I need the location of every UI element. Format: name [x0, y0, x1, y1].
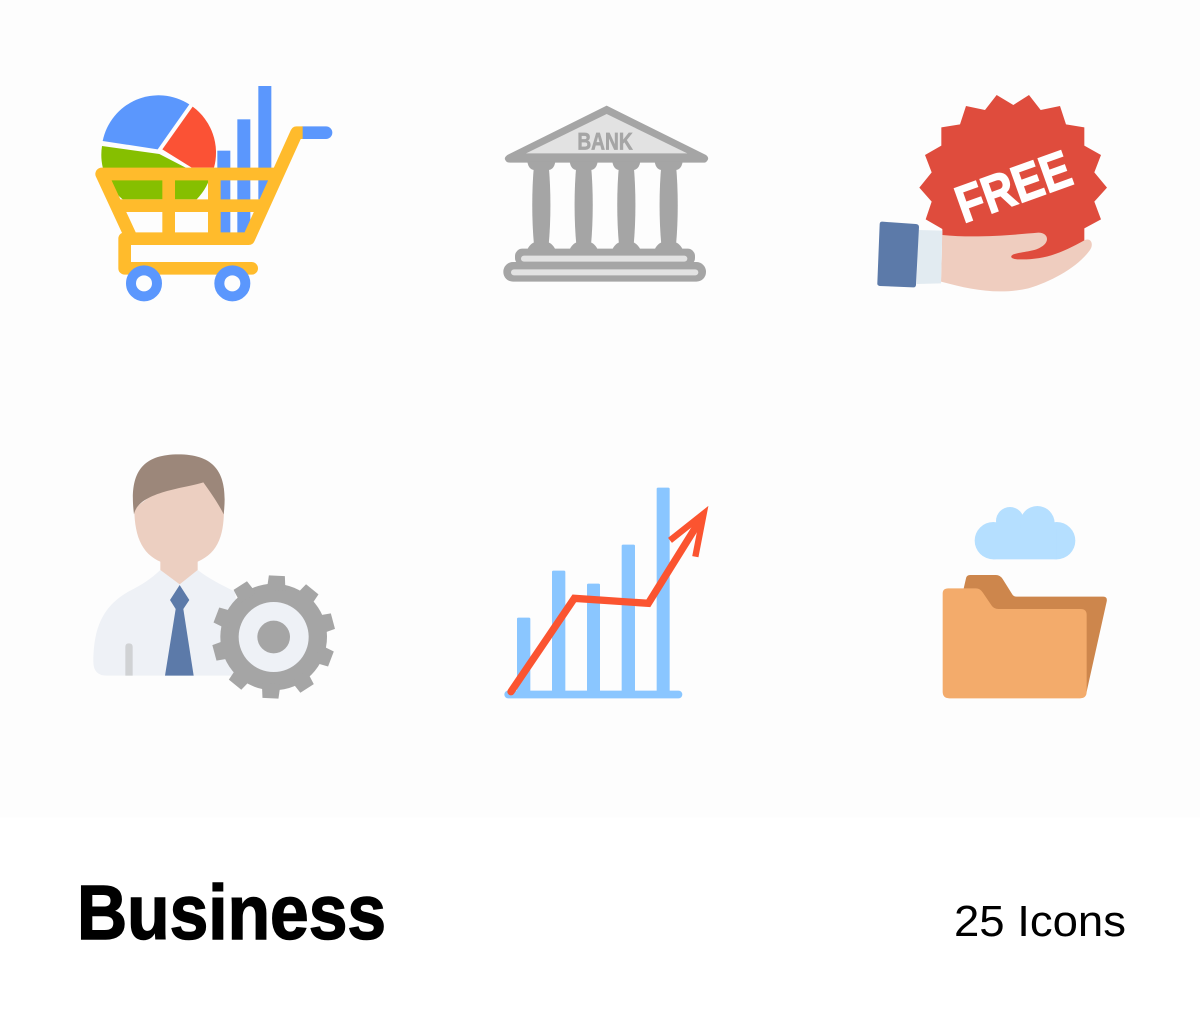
icon: free badge in hand: [877, 95, 1107, 291]
bank columns: [527, 162, 683, 249]
shirt pocket mark: [125, 643, 133, 676]
cart frame: [102, 133, 303, 268]
folder back: [963, 575, 1107, 692]
cloud: [975, 506, 1075, 559]
shirt body: [93, 570, 245, 676]
necktie: [165, 585, 194, 676]
jacket sleeve: [877, 222, 919, 287]
arrow head: [670, 514, 704, 557]
chart bars: [504, 488, 682, 698]
cart wheels: [131, 270, 245, 296]
icon: bank building: [503, 106, 708, 282]
free label: FREE: [948, 140, 1079, 235]
icon count: 25 Icons: [954, 897, 1126, 946]
cart handle grip: [303, 114, 326, 152]
icon: growth bar chart with arrow: [504, 488, 704, 698]
hand: [941, 233, 1092, 291]
face: [134, 475, 224, 563]
icon: shopping cart with charts: [101, 86, 326, 296]
gear: [212, 575, 335, 699]
title: Business: [77, 870, 386, 956]
folder front: [943, 588, 1087, 698]
roof pediment: [526, 114, 687, 153]
icon: businessman with gear: [93, 454, 335, 699]
bar chart in cart: [217, 86, 271, 233]
bank steps: [503, 249, 706, 282]
shirt cuff: [917, 230, 942, 284]
hair: [133, 454, 225, 514]
icon: cloud folder: [943, 506, 1107, 698]
bank label: BANK: [577, 129, 633, 156]
pie chart in cart: [101, 95, 216, 199]
bank roof: [505, 106, 708, 163]
neck: [160, 557, 198, 584]
starburst badge: [919, 95, 1107, 262]
trend line: [511, 517, 702, 692]
